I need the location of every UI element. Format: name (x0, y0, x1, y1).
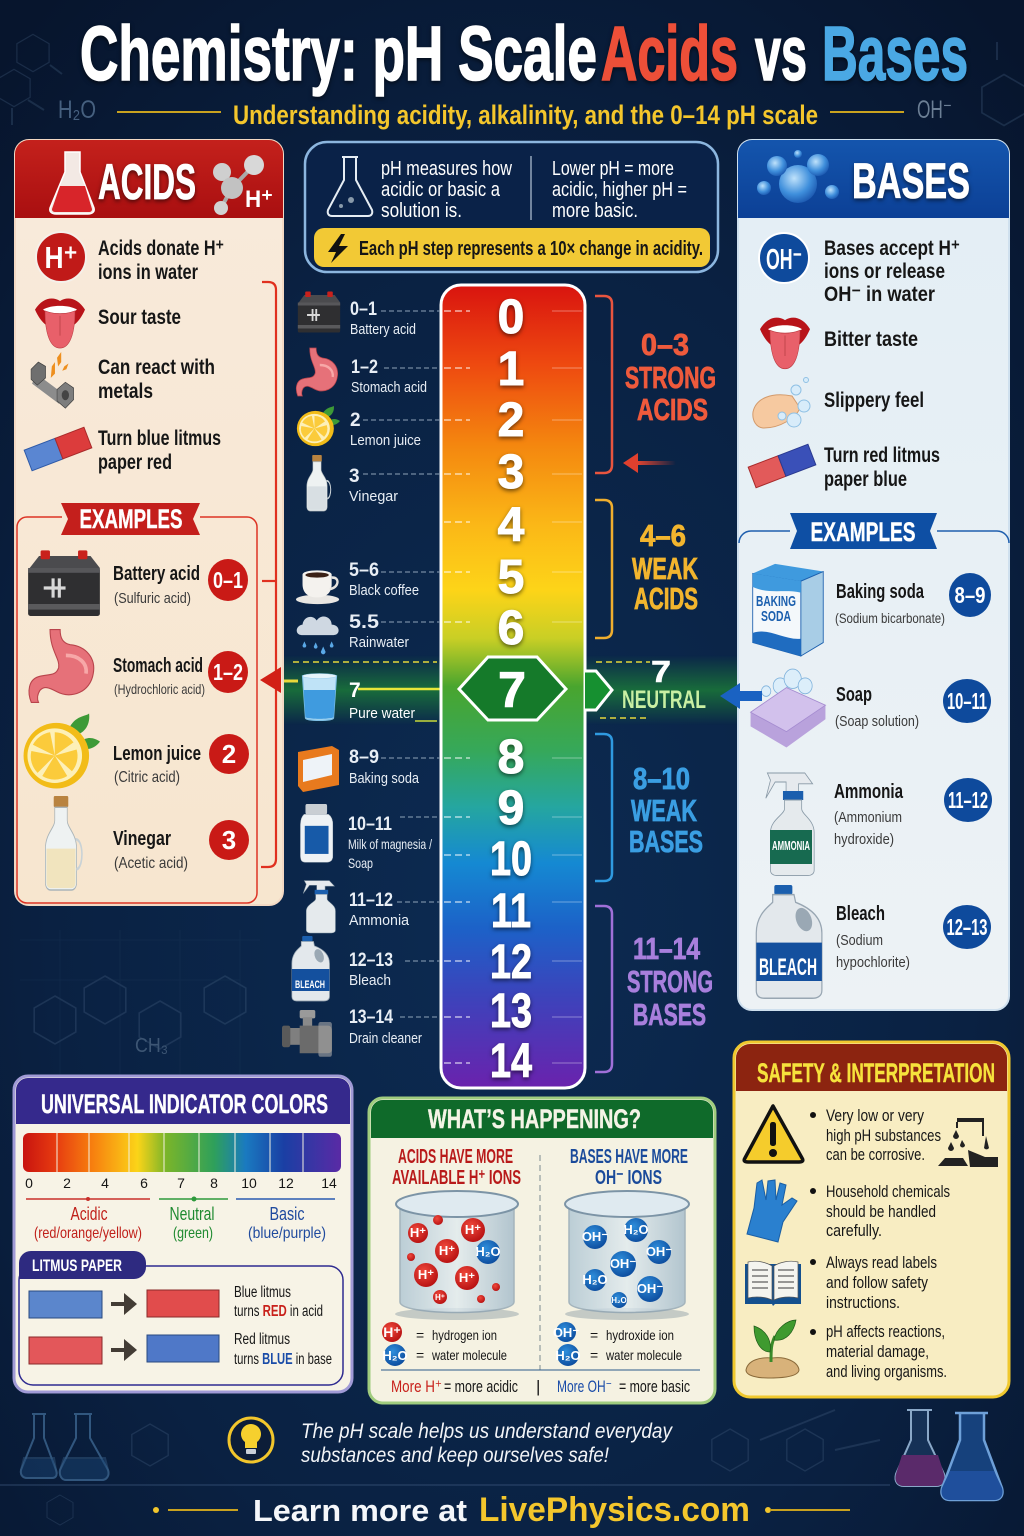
example: lemon: 2 (222, 739, 236, 769)
litmus row 1: turns RED in acid (234, 1303, 323, 1320)
example: bleach: hypochlorite) (836, 954, 910, 971)
label: acidic: (red/orange/yellow) (34, 1225, 142, 1242)
item: black coffee: Black coffee (349, 582, 419, 599)
flasks right (895, 1410, 1003, 1500)
litmus tab: LITMUS PAPER (32, 1256, 122, 1275)
legend: acid side (382, 1322, 507, 1366)
range: weak acids: WEAK (632, 551, 698, 586)
litmus box (19, 1266, 343, 1385)
scale numbers: 13 (490, 985, 532, 1038)
indicator header band (16, 1078, 350, 1124)
text: lower pH: acidic, higher pH = (552, 179, 687, 201)
range: strong acids: ACIDS (637, 392, 708, 427)
example: baking soda: Baking soda (836, 581, 925, 603)
item: ammonia: Ammonia (349, 912, 410, 929)
icon: light bulb (229, 1418, 273, 1462)
item: baking soda (298, 746, 440, 792)
footer link: Learn more at (253, 1493, 467, 1528)
icon: sprout (746, 1320, 799, 1378)
item: pure water: 7 (349, 679, 361, 702)
range: weak bases: WEAK (631, 793, 697, 828)
bullet: labels (810, 1254, 937, 1312)
arrow: soap to neutral (720, 683, 762, 709)
item: battery acid: Battery acid (350, 321, 416, 338)
item: lemon juice: Lemon juice (350, 432, 421, 449)
arrow: to strong acids (623, 453, 676, 473)
beaker: base ions: H₂O (611, 1296, 627, 1305)
label: acidic: Acidic (70, 1204, 108, 1224)
range: weak bases: BASES (629, 824, 703, 859)
item: battery acid: 0–1 (350, 299, 377, 320)
footer link: LivePhysics.com (479, 1491, 750, 1529)
label: neutral: 7 (651, 654, 671, 689)
acid heading: ACIDS HAVE MORE (398, 1146, 513, 1168)
item: stomach acid (296, 348, 440, 396)
example: bleach: 12–13 (946, 914, 988, 940)
item: ammonia: 11–12 (349, 890, 393, 911)
bullet: labels: instructions. (826, 1294, 900, 1312)
beaker: base ions: OH⁻ (610, 1256, 636, 1271)
closing message (301, 1420, 673, 1467)
text: lower pH: more basic. (552, 200, 638, 222)
label: basic (248, 1204, 326, 1242)
range: weak acids: 4–6 (640, 518, 686, 553)
fact: slippery: Slippery feel (824, 389, 924, 412)
title: Acids (601, 11, 738, 97)
example: lemon: Lemon juice (113, 743, 201, 765)
example: ammonia: (Ammonium (834, 809, 902, 826)
tick marks (444, 311, 470, 1063)
label: acidic (34, 1204, 142, 1242)
example: ammonia: 11–12 (948, 787, 988, 813)
fact: donate (98, 237, 224, 284)
range: weak bases (595, 734, 703, 881)
example: ammonia: hydroxide) (834, 831, 894, 848)
fact: accept (824, 237, 960, 306)
item: battery acid (298, 292, 440, 338)
example: stomach: (Hydrochloric acid) (114, 681, 205, 697)
fact: metals: Can react with (98, 356, 215, 379)
range: strong acids (595, 296, 716, 473)
summary row: | (536, 1377, 540, 1396)
icon: H+ circle (36, 232, 86, 282)
examples ribbon: EXAMPLES (80, 504, 182, 534)
arrow: acids to water (260, 667, 281, 693)
icon: litmus blue to red (24, 427, 92, 471)
legend: acid side: = (416, 1347, 424, 1363)
closing message: substances and keep ourselves safe! (301, 1444, 609, 1467)
neutral 7 hexagon: 7 (498, 662, 526, 718)
example: battery: (Sulfuric acid) (114, 590, 191, 607)
indicator range lines (26, 1196, 335, 1202)
legend: acid side: H₂O (382, 1348, 408, 1363)
indicator heading: UNIVERSAL INDICATOR COLORS (41, 1089, 328, 1119)
example: vinegar: 3 (222, 825, 236, 855)
pH scale bar (441, 285, 612, 1088)
fact: litmus (98, 427, 221, 474)
item: milk of magnesia: Milk of magnesia / (348, 836, 432, 852)
label: neutral: NEUTRAL (622, 686, 706, 714)
label: neutral: (green) (173, 1225, 213, 1242)
litmus row 1 (29, 1284, 323, 1320)
beaker: base ions: OH⁻ (637, 1281, 663, 1296)
legend: base side: water molecule (605, 1347, 682, 1363)
panel: bases (738, 140, 1009, 1010)
happening header band (371, 1100, 713, 1138)
item: milk of magnesia: Soap (348, 855, 373, 871)
litmus row 2 (29, 1331, 332, 1368)
scale numbers: 9 (498, 782, 524, 835)
icon: warning triangle (744, 1106, 803, 1162)
example: stomach: 1–2 (213, 659, 243, 685)
example: battery: Battery acid (113, 563, 200, 585)
beaker: base ions: H₂O (623, 1222, 649, 1237)
range: strong bases: STRONG (627, 964, 713, 999)
legend: acid side: H⁺ (383, 1324, 401, 1340)
left substance list (282, 292, 440, 1057)
scale tick labels: 12 (278, 1175, 294, 1191)
band: neutral glow (283, 655, 738, 725)
item: black coffee: 5–6 (349, 560, 379, 581)
acids heading: ACIDS (98, 154, 196, 210)
fact: litmus: paper red (98, 451, 172, 474)
example: baking soda (753, 564, 991, 656)
legend: base side: hydroxide ion (606, 1327, 674, 1343)
icon: molecule H+ (213, 155, 273, 215)
happening heading: WHAT’S HAPPENING? (428, 1104, 641, 1134)
litmus row 2: turns BLUE in base (234, 1351, 332, 1368)
item: bleach: 12–13 (349, 950, 393, 971)
beaker: acid ions: H⁺ (459, 1270, 475, 1285)
beaker: base ions: H₂O (582, 1272, 608, 1287)
flasks left (21, 1414, 109, 1480)
summary row: = more acidic (444, 1377, 518, 1396)
scale tick labels: 10 (241, 1175, 257, 1191)
icon: H+ circle: H⁺ (44, 240, 78, 275)
examples box (739, 531, 1009, 543)
fact: donate: Acids donate H⁺ (98, 237, 224, 260)
label: basic: Basic (270, 1204, 304, 1224)
range: weak acids: ACIDS (634, 581, 698, 616)
range: strong acids: STRONG (625, 360, 716, 395)
fact: accept: OH⁻ in water (824, 283, 935, 306)
examples ribbon (61, 503, 200, 535)
summary row: More H⁺ (391, 1377, 442, 1396)
item: baking soda: Baking soda (349, 770, 420, 787)
item: vinegar: Vinegar (349, 488, 398, 505)
scale numbers: 2 (498, 394, 524, 447)
icon: blue glove (747, 1180, 797, 1242)
example: stomach (29, 630, 248, 702)
item: milk of magnesia: 10–11 (348, 814, 392, 835)
item: lemon juice (297, 406, 440, 449)
litmus row 1: Blue litmus (234, 1284, 291, 1301)
example: battery (28, 550, 248, 616)
item: drain cleaner: 13–14 (349, 1007, 393, 1028)
scale tick labels: 2 (63, 1175, 71, 1191)
item: ammonia (303, 881, 440, 933)
example: bleach: Bleach (836, 903, 885, 925)
beaker: acid ions (395, 1191, 519, 1320)
beaker: base ions: OH⁻ (646, 1244, 672, 1259)
fact: bitter: Bitter taste (824, 328, 918, 351)
acid heading: AVAILABLE H⁺ IONS (392, 1167, 521, 1189)
bullet: household: should be handled (826, 1203, 936, 1221)
scale tick labels: 7 (177, 1175, 185, 1191)
acid heading (392, 1146, 521, 1189)
scale tick labels: 6 (140, 1175, 148, 1191)
range: weak acids (595, 500, 698, 638)
legend: acid side: water molecule (431, 1347, 507, 1363)
item: rainwater (297, 612, 440, 654)
summary row: = more basic (619, 1377, 690, 1396)
example: soap: 10–11 (947, 688, 987, 714)
scale numbers: 3 (498, 446, 524, 499)
panel: universal indicator (14, 1076, 352, 1392)
scale numbers: 1 (498, 343, 524, 396)
item: black coffee (296, 560, 440, 604)
fact: donate: ions in water (98, 261, 198, 284)
label: neutral (622, 654, 706, 714)
closing message: The pH scale helps us understand everyday (301, 1420, 673, 1443)
bullet: household: Household chemicals (826, 1183, 950, 1201)
example: ammonia: Ammonia (834, 781, 904, 803)
bullet: corrosive (810, 1107, 941, 1164)
fact: litmus: Turn blue litmus (98, 427, 221, 450)
panel: safety (734, 1042, 1009, 1397)
item: rainwater: Rainwater (349, 634, 409, 651)
fact: accept: Bases accept H⁺ (824, 237, 960, 260)
neutral 7 hexagon (459, 657, 566, 720)
examples box (17, 517, 257, 903)
color bar (23, 1133, 341, 1172)
legend: acid side: hydrogen ion (432, 1327, 497, 1343)
example: lemon: (Citric acid) (114, 769, 180, 786)
range: strong bases: BASES (633, 997, 706, 1032)
item: bleach: BLEACH (295, 979, 325, 991)
example: baking soda: SODA (761, 608, 791, 625)
scale numbers: 5 (498, 551, 524, 604)
legend: base side: H₂O (555, 1348, 581, 1363)
summary row (391, 1377, 690, 1396)
bullet: labels: and follow safety (826, 1274, 929, 1292)
scale tick labels: 8 (210, 1175, 218, 1191)
range: strong bases (595, 906, 713, 1072)
item: baking soda: 8–9 (349, 747, 379, 768)
scale numbers: 8 (498, 731, 524, 784)
fact: metals: metals (98, 380, 153, 403)
legend: base side: OH⁻ (553, 1325, 579, 1340)
item: pure water: Pure water (349, 705, 415, 722)
scale numbers: 12 (490, 936, 532, 989)
example: vinegar: (Acetic acid) (114, 855, 188, 872)
example: ammonia (766, 773, 992, 876)
beaker: acid ions: H₂O (475, 1244, 501, 1259)
examples ribbon (790, 513, 937, 549)
text: definition: pH measures how (381, 158, 512, 180)
beaker: acid ions: H⁺ (439, 1243, 455, 1258)
beaker: acid ions: H⁺ (410, 1225, 426, 1240)
range: strong bases: 11–14 (633, 931, 701, 966)
base heading: BASES HAVE MORE (570, 1146, 688, 1168)
base heading: OH⁻ IONS (595, 1167, 662, 1189)
example: vinegar: Vinegar (113, 828, 171, 850)
item: stomach acid: Stomach acid (351, 379, 427, 396)
example: soap: (Soap solution) (835, 713, 919, 730)
litmus row 2: Red litmus (234, 1331, 290, 1348)
fact: litmus: paper blue (824, 468, 907, 491)
summary row: More OH⁻ (557, 1377, 612, 1396)
callout: 10x (314, 228, 710, 267)
item: stomach acid: 1–2 (351, 357, 378, 378)
icon: sour tongue (35, 299, 85, 348)
fact: litmus (824, 444, 940, 491)
example: soap (751, 669, 991, 747)
base heading (570, 1146, 688, 1189)
bullet: corrosive: can be corrosive. (826, 1146, 925, 1164)
example: battery: 0–1 (213, 567, 243, 593)
title: Chemistry: pH Scale (80, 11, 597, 97)
example: stomach: Stomach acid (113, 655, 203, 677)
item: lemon juice: 2 (350, 410, 361, 431)
item: bleach (292, 936, 440, 1001)
icon: corrosive pictogram (938, 1118, 998, 1167)
example: lemon (24, 714, 249, 788)
example: ammonia: AMMONIA (772, 838, 810, 853)
legend: base side (553, 1322, 682, 1366)
item: pure water (302, 674, 415, 722)
item: vinegar (307, 455, 440, 511)
bullet: household (810, 1183, 950, 1240)
formula OH-: OH⁻ (917, 96, 952, 124)
label: neutral (170, 1204, 214, 1242)
text: lower pH (552, 158, 687, 222)
example: vinegar (45, 796, 249, 890)
example: baking soda: BAKING (756, 593, 796, 610)
subtitle: Understanding acidity, alkalinity, and the 0–14 pH scale (233, 100, 818, 130)
bullet: household: carefully. (826, 1222, 882, 1240)
scale numbers: 14 (490, 1035, 532, 1088)
scale numbers: 0 (498, 291, 524, 344)
acids header band (15, 140, 283, 218)
bases heading: BASES (852, 153, 970, 209)
fact: litmus: Turn red litmus (824, 444, 940, 467)
icon: metal bolt (31, 352, 74, 408)
example: bleach (756, 885, 991, 998)
text: lower pH: Lower pH = more (552, 158, 674, 180)
bracket: acid range (261, 282, 276, 867)
range: weak bases: 8–10 (633, 761, 690, 796)
item: drain cleaner: Drain cleaner (349, 1030, 422, 1047)
safety header band (736, 1044, 1007, 1091)
scale numbers: 10 (490, 833, 532, 886)
icon: OH- circle: OH⁻ (766, 244, 802, 276)
item: drain cleaner (282, 1007, 440, 1057)
icon: bitter tongue (760, 318, 810, 369)
bullet: reactions (810, 1323, 947, 1381)
beaker: acid ions: H⁺ (418, 1267, 434, 1282)
example: baking soda: 8–9 (954, 582, 986, 608)
examples ribbon: EXAMPLES (810, 517, 916, 547)
icon: red flask (50, 152, 94, 214)
bases header band (738, 140, 1009, 218)
label: basic: (blue/purple) (248, 1225, 326, 1242)
icon: outline flask (328, 157, 372, 216)
beaker: acid ions: H⁺ (465, 1222, 481, 1237)
formula H2O: H₂O (58, 96, 96, 124)
fact: sour: Sour taste (98, 306, 181, 329)
icon: OH- circle (759, 233, 809, 283)
bullet: reactions: material damage, (826, 1343, 929, 1361)
range: strong acids: 0–3 (641, 327, 689, 362)
item: rainwater: 5.5 (349, 612, 379, 633)
bullet: reactions: pH affects reactions, (826, 1323, 945, 1341)
beaker: base ions (565, 1191, 689, 1320)
panel: what pH measures (305, 142, 718, 272)
litmus tab (19, 1251, 146, 1279)
icon: bubbles (757, 150, 839, 203)
scale tick labels: 0 (25, 1175, 33, 1191)
neutral pointer (585, 671, 612, 710)
fact: accept: ions or release (824, 260, 945, 283)
scale tick labels: 4 (101, 1175, 109, 1191)
text: definition: acidic or basic a (381, 179, 501, 201)
footer link (153, 1491, 850, 1529)
scale tick labels: 14 (321, 1175, 337, 1191)
text: definition (381, 158, 512, 222)
icon: molecule H+: H⁺ (245, 186, 273, 213)
item: vinegar: 3 (349, 466, 360, 487)
callout: 10x: Each pH step represents a 10× change in acidity. (359, 238, 703, 260)
bullet: labels: Always read labels (826, 1254, 937, 1272)
scale numbers: 11 (491, 885, 531, 938)
legend: acid side: = (416, 1327, 424, 1343)
bullet: corrosive: high pH substances (826, 1127, 941, 1145)
scale tick labels (25, 1175, 337, 1191)
panel: acids (15, 140, 283, 905)
bullet: corrosive: Very low or very (826, 1107, 925, 1125)
icon: litmus red to blue (748, 444, 816, 488)
icon: open book (745, 1261, 801, 1306)
beaker: base ions: OH⁻ (582, 1229, 608, 1244)
text: definition: solution is. (381, 200, 462, 222)
scale numbers: 6 (498, 602, 524, 655)
panel: what's happening (369, 1098, 715, 1403)
item: bleach: Bleach (349, 972, 391, 989)
scale numbers (490, 291, 532, 1088)
item: milk of magnesia (300, 804, 440, 871)
legend: base side: = (590, 1327, 598, 1343)
legend: base side: = (590, 1347, 598, 1363)
label: neutral: Neutral (170, 1204, 214, 1224)
scale numbers: 4 (498, 499, 525, 552)
bullet: reactions: and living organisms. (826, 1363, 947, 1381)
beaker: acid ions: H⁺ (435, 1293, 445, 1302)
example: bleach: (Sodium (836, 932, 883, 949)
example: bleach: BLEACH (759, 954, 817, 981)
title: vs (755, 11, 807, 97)
example: soap: Soap (836, 684, 872, 706)
icon: soapy hand (753, 378, 810, 428)
fact: metals (98, 356, 215, 403)
example: baking soda: (Sodium bicarbonate) (835, 610, 945, 626)
formula CH3: CH₃ (135, 1035, 168, 1057)
